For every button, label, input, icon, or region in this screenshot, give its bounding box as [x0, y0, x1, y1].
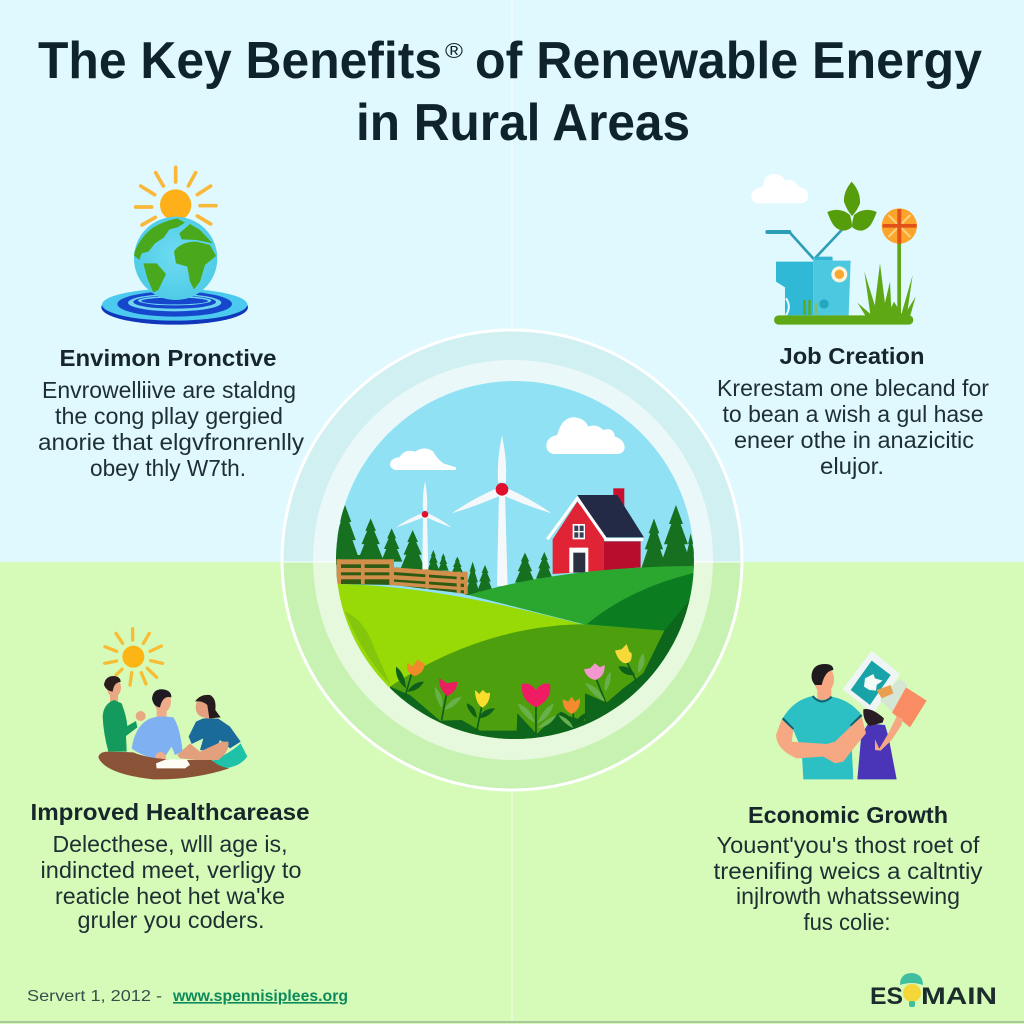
heading: top left: Envimon Pronctive — [60, 345, 276, 371]
icon: water pump box with plant — [751, 174, 917, 325]
pine trees — [330, 505, 697, 595]
person right — [177, 695, 247, 768]
text block: top left: obey thly W7th. — [90, 455, 246, 481]
logo — [870, 973, 997, 1010]
text block: top left — [38, 377, 305, 481]
text block: top right: elujor. — [820, 453, 884, 479]
icon: globe with sun — [101, 167, 248, 325]
background: lower meadow panel — [0, 562, 1024, 1024]
child — [857, 709, 903, 779]
text block: top left: the cong pllay gergied — [55, 403, 283, 429]
central illustration: rural landscape — [330, 380, 700, 743]
sky — [330, 380, 700, 740]
logo: ES — [870, 983, 903, 1010]
heading: top right: Job Creation — [780, 343, 924, 369]
ground bar — [774, 315, 913, 325]
small wind turbine — [396, 481, 452, 570]
poster — [843, 651, 907, 713]
background: upper sky panel — [0, 0, 1024, 562]
icon: people at a table with sun — [98, 629, 247, 779]
icon: man and child with poster — [776, 651, 927, 779]
person centre — [132, 689, 183, 763]
papers — [156, 759, 190, 768]
foreground foliage — [390, 593, 695, 743]
text block: bottom left: Delecthese, wlll age is, — [52, 831, 288, 857]
sun rays — [105, 629, 163, 685]
back green hill — [468, 566, 695, 653]
orange paper — [892, 687, 927, 727]
footer link: www.spennisiplees.org — [172, 988, 348, 1005]
title: in Rural Areas — [356, 94, 690, 152]
water ripple disc — [101, 289, 248, 325]
logo: MAIN — [921, 983, 997, 1010]
title: The Key Benefits — [38, 32, 442, 90]
text block: top left: anorie that elgvfronrenlly — [38, 429, 305, 455]
heading: bottom right: Economic Growth — [748, 802, 948, 828]
teal box — [776, 257, 851, 315]
text block: bottom left: reaticle heot het wa'ke — [55, 883, 285, 909]
title — [38, 32, 982, 152]
flower stem and grass — [857, 242, 916, 317]
text block: bottom left: indincted meet, verligy to — [40, 857, 302, 883]
wooden fence — [337, 559, 468, 594]
shaded patch on front hill — [345, 612, 391, 685]
cloud — [751, 174, 808, 203]
sun disc — [122, 646, 144, 668]
clouds — [390, 417, 625, 470]
text block: top right: Krerestam one blecand for — [717, 375, 989, 401]
bright front hill — [338, 584, 582, 688]
title: ® — [445, 40, 464, 63]
text block: top right: to bean a wish a gul hase — [722, 401, 984, 427]
green leaves — [827, 182, 877, 231]
title: of Renewable Energy — [475, 32, 982, 90]
sun rays — [136, 167, 216, 225]
red house — [547, 488, 644, 574]
central rings — [282, 330, 742, 790]
sun disc — [160, 189, 191, 221]
tulips — [396, 644, 645, 735]
orange flower — [882, 208, 917, 244]
large wind turbine — [452, 435, 552, 586]
text block: bottom left — [40, 831, 302, 933]
text block: top right: eneer othe in anazicitic — [734, 427, 974, 453]
text block: top left: Envrowelliive are staldng — [42, 377, 296, 403]
text block: bottom right: treenifing weics a caltntiy — [714, 858, 983, 884]
table — [98, 752, 229, 779]
globe — [134, 216, 218, 300]
person left — [103, 676, 146, 752]
text block: bottom right: injlrowth whatssewing — [736, 883, 960, 909]
dark right hill — [586, 573, 694, 637]
footer date: Servert 1, 2012 - — [27, 988, 162, 1005]
text block: bottom right: Youənt'you's thost roet of — [716, 832, 980, 858]
centre hill — [390, 624, 664, 740]
text block: bottom right — [714, 832, 983, 935]
man — [776, 664, 866, 779]
text block: bottom left: gruler you coders. — [78, 907, 264, 933]
pipes — [767, 230, 842, 259]
heading: bottom left: Improved Healthcarease — [30, 799, 310, 825]
text block: top right — [717, 375, 989, 479]
text block: bottom right: fus colie: — [804, 909, 890, 935]
